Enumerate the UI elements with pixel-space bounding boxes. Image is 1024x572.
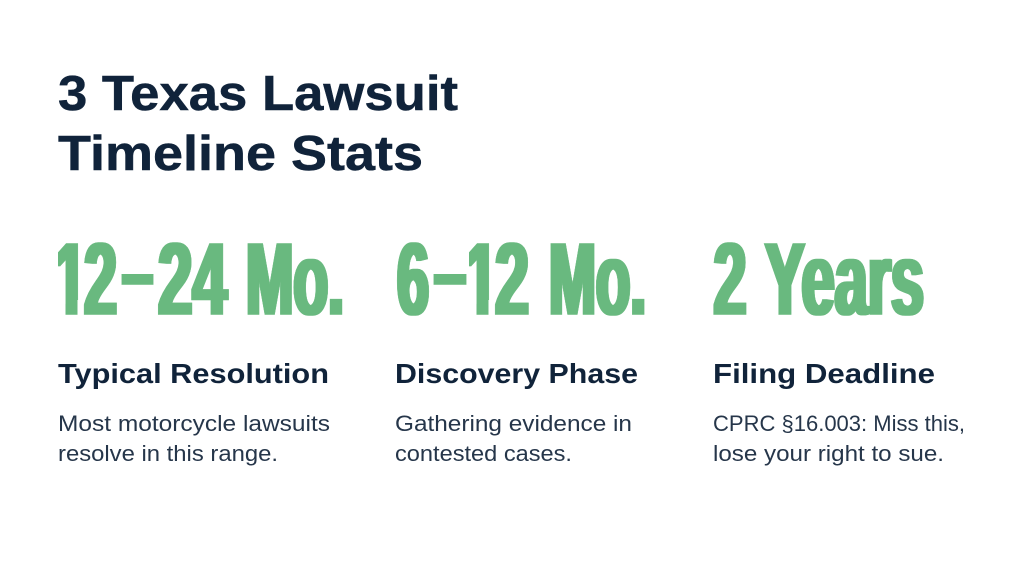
stat: 12–24 Mo.: 1: [54, 222, 87, 336]
text: discovery phase description: [395, 411, 632, 466]
title: Timeline Stats: [58, 127, 423, 181]
panel: filing deadline: [713, 222, 965, 466]
stat: 6–12 Mo.: Mo.: [549, 222, 646, 336]
stat: 6–12 Mo.: 1: [465, 222, 498, 336]
panel: typical resolution: [58, 242, 342, 466]
text: typical resolution description: [58, 411, 330, 466]
stat: 2 Years: 2: [714, 222, 746, 336]
heading: discovery phase: Discovery Phase: [395, 358, 638, 389]
heading: typical resolution: Typical Resolution: [58, 358, 329, 389]
text: discovery phase description: contested cases.: [395, 441, 572, 466]
stat: 12–24 Mo.: [58, 242, 342, 316]
text: filing deadline description: lose your right to sue.: [713, 441, 944, 466]
stat: 12–24 Mo.: 2: [84, 222, 117, 336]
stat: 6–12 Mo.: 6: [397, 222, 429, 336]
stat: 12–24 Mo.: 24: [158, 222, 227, 336]
text: filing deadline description: [713, 411, 965, 466]
stat: 6–12 Mo.: 2: [495, 222, 529, 336]
text: typical resolution description: resolve in this range.: [58, 441, 278, 466]
text: typical resolution description: Most motorcycle lawsuits: [58, 411, 330, 436]
title: 3 Texas Lawsuit: [58, 67, 458, 121]
text: filing deadline description: CPRC §16.003: Miss this,: [713, 411, 965, 436]
stat: 6–12 Mo.: –: [434, 214, 466, 329]
stat: 2 Years: [714, 222, 924, 336]
stat: 12–24 Mo.: –: [122, 214, 153, 329]
title: [58, 67, 458, 181]
stat: 6–12 Mo.: [396, 242, 644, 316]
stat: 12–24 Mo.: Mo.: [246, 222, 344, 336]
text: discovery phase description: Gathering evidence in: [395, 411, 632, 436]
heading: filing deadline: Filing Deadline: [713, 358, 935, 389]
panel: discovery phase: [396, 242, 644, 461]
